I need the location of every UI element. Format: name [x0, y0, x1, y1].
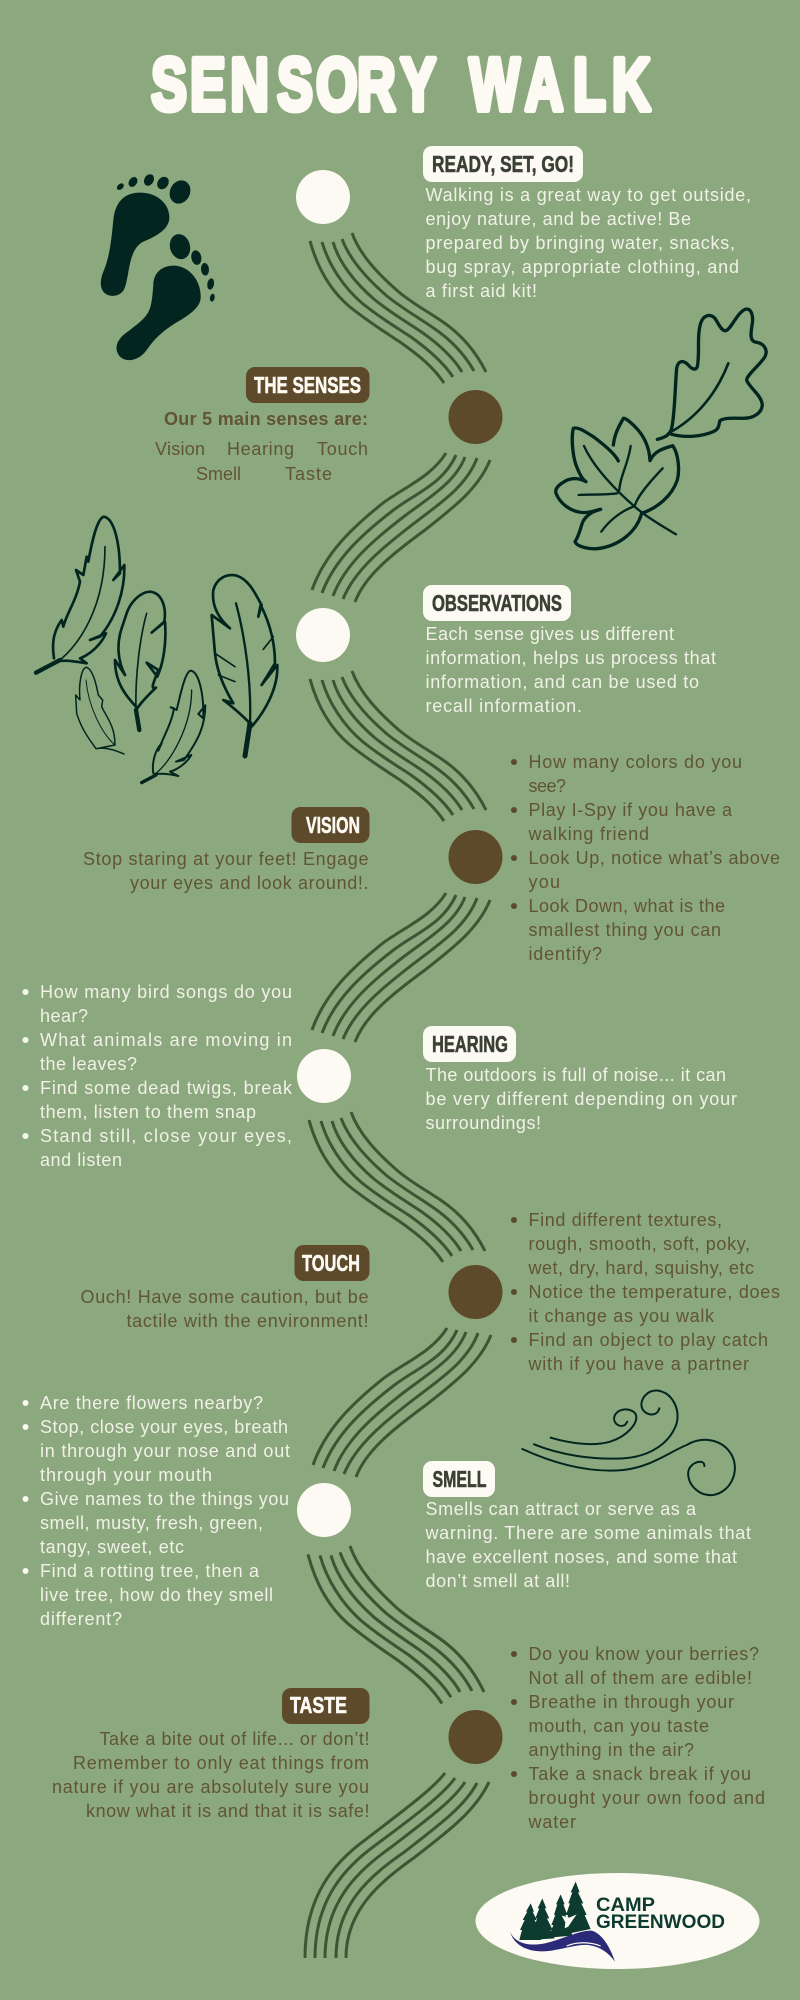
panel: taste — [52, 1644, 765, 1832]
logo wordmark: CAMP — [596, 1894, 655, 1916]
logo wordmark — [596, 1894, 725, 1933]
bullet list: smallest thing you can — [528, 920, 721, 940]
text block — [426, 185, 751, 301]
bullet list: Play I-Spy if you have a — [528, 800, 733, 820]
bullet list: Breathe in through your — [528, 1692, 734, 1712]
title: SENSORY WALK — [151, 43, 650, 126]
path line: taste to end — [305, 1773, 489, 1958]
bullet list: Notice the temperature, does — [528, 1282, 780, 1302]
path line: vision to hearing — [312, 893, 490, 1042]
text block: The outdoors is full of noise... it can — [426, 1065, 726, 1085]
text block: enjoy nature, and be active! Be — [426, 209, 691, 229]
text block: Our 5 main senses are: — [164, 409, 368, 429]
text block: a first aid kit! — [426, 281, 537, 301]
bullet list: rough, smooth, soft, poky, — [528, 1234, 750, 1254]
bullet list: tangy, sweet, etc — [40, 1537, 184, 1557]
text block: prepared by bringing water, snacks, — [426, 233, 735, 253]
heading — [292, 807, 370, 843]
bullet list — [511, 1644, 765, 1832]
text block — [52, 1729, 370, 1821]
text block: Walking is a great way to get outside, — [426, 185, 751, 205]
bullet list: different? — [40, 1609, 122, 1629]
heading: READY, SET, GO! — [432, 151, 574, 177]
icon: footprints — [101, 172, 215, 360]
bullet list: walking friend — [528, 824, 649, 844]
trail marker 2 — [448, 390, 502, 444]
bullet list: live tree, how do they smell — [40, 1585, 273, 1605]
bullet list: Take a snack break if you — [528, 1764, 751, 1784]
text block: Vision — [155, 439, 205, 459]
trail marker 3 — [296, 608, 350, 662]
bullet list: anything in the air? — [528, 1740, 694, 1760]
text block: surroundings! — [426, 1113, 541, 1133]
icon: feathers — [36, 517, 277, 783]
text block — [83, 849, 368, 893]
text block: tactile with the environment! — [126, 1311, 368, 1331]
bullet list: mouth, can you taste — [528, 1716, 709, 1736]
heading: SMELL — [432, 1466, 486, 1492]
bullet list: How many bird songs do you — [40, 982, 292, 1002]
trail marker 5 — [297, 1049, 351, 1103]
text block: bug spray, appropriate clothing, and — [426, 257, 739, 277]
logo wordmark: GREENWOOD — [596, 1911, 725, 1933]
bullet list — [22, 982, 293, 1170]
heading — [246, 367, 370, 403]
bullet list: Look Down, what is the — [528, 896, 725, 916]
bullet list: in through your nose and out — [40, 1441, 290, 1461]
bullet list: How many colors do you — [528, 752, 742, 772]
icon: leaves — [556, 309, 766, 549]
text block — [424, 1499, 751, 1591]
bullet list: hear? — [40, 1006, 88, 1026]
text block: Ouch! Have some caution, but be — [80, 1287, 368, 1307]
bullet list: Find different textures, — [528, 1210, 722, 1230]
bullet list: brought your own food and — [528, 1788, 765, 1808]
bullet list: see? — [528, 776, 566, 796]
bullet list — [22, 1393, 290, 1629]
heading: TASTE — [290, 1692, 347, 1718]
icon: wind gust — [522, 1391, 735, 1495]
panel: hearing — [22, 982, 737, 1170]
text block: recall information. — [426, 696, 582, 716]
bullet list: Find an object to play catch — [528, 1330, 768, 1350]
text block: information, and can be used to — [426, 672, 699, 692]
path line: touch to smell — [313, 1328, 491, 1477]
heading: HEARING — [432, 1031, 508, 1057]
bullet list: Give names to the things you — [40, 1489, 289, 1509]
bullet list: Not all of them are edible! — [528, 1668, 752, 1688]
text block: warning. There are some animals that — [424, 1523, 751, 1543]
trail marker 6 — [448, 1265, 502, 1319]
text block: Remember to only eat things from — [73, 1753, 369, 1773]
trail marker 7 — [297, 1483, 351, 1537]
bullet list: with if you have a partner — [528, 1354, 749, 1374]
panel: smell — [22, 1393, 751, 1629]
path line: smell to taste — [308, 1546, 484, 1704]
text block: nature if you are absolutely sure you — [52, 1777, 369, 1797]
text block: know what it is and that it is safe! — [86, 1801, 370, 1821]
trail marker 1 — [296, 170, 350, 224]
panel: touch — [80, 1210, 780, 1374]
text block: don’t smell at all! — [426, 1571, 570, 1591]
bullet list: it change as you walk — [528, 1306, 715, 1326]
bullet list: Look Up, notice what’s above — [528, 848, 780, 868]
path line: senses to observations — [312, 453, 490, 602]
panel: vision — [83, 752, 780, 964]
heading: TOUCH — [302, 1250, 360, 1276]
text block: have excellent noses, and some that — [426, 1547, 737, 1567]
bullet list: through your mouth — [40, 1465, 212, 1485]
path line: start to senses — [310, 233, 486, 383]
trail marker 4 — [448, 830, 502, 884]
text block: Smells can attract or serve as a — [426, 1499, 697, 1519]
heading — [294, 1245, 370, 1281]
bullet list: them, listen to them snap — [40, 1102, 256, 1122]
heading — [423, 1026, 516, 1062]
bullet list: Find some dead twigs, break — [40, 1078, 293, 1098]
bullet list: wet, dry, hard, squishy, etc — [528, 1258, 754, 1278]
trail marker 8 — [448, 1710, 502, 1764]
bullet list: the leaves? — [40, 1054, 137, 1074]
bullet list: smell, musty, fresh, green, — [40, 1513, 263, 1533]
text block — [426, 624, 716, 716]
text block — [426, 1065, 737, 1133]
path line: hearing to touch — [309, 1112, 485, 1262]
panel: ready, set, go — [423, 146, 751, 301]
bullet list: Stand still, close your eyes, — [40, 1126, 292, 1146]
bullet list: Are there flowers nearby? — [40, 1393, 263, 1413]
bullet list: you — [528, 872, 560, 892]
text block — [80, 1287, 368, 1331]
heading: OBSERVATIONS — [432, 590, 562, 616]
text block: Taste — [285, 464, 332, 484]
heading — [423, 146, 583, 182]
text block: Take a bite out of life... or don’t! — [100, 1729, 370, 1749]
bullet list: Do you know your berries? — [528, 1644, 759, 1664]
bullet list: water — [528, 1812, 576, 1832]
bullet list — [511, 752, 780, 964]
text block: Stop staring at your feet! Engage — [83, 849, 368, 869]
bullet list: Find a rotting tree, then a — [40, 1561, 260, 1581]
bullet list — [511, 1210, 780, 1374]
text block: be very different depending on your — [426, 1089, 737, 1109]
text block: Touch — [317, 439, 368, 459]
icon: trees and dove — [510, 1882, 615, 1962]
text block: Each sense gives us different — [426, 624, 674, 644]
path line: observations to vision — [310, 671, 486, 821]
text block — [155, 409, 368, 484]
heading: THE SENSES — [254, 372, 361, 398]
text block: information, helps us process that — [426, 648, 716, 668]
heading: VISION — [306, 812, 360, 838]
panel: observations — [423, 585, 716, 716]
heading — [282, 1688, 370, 1724]
text block: Hearing — [227, 439, 294, 459]
heading — [423, 585, 571, 621]
bullet list: identify? — [528, 944, 602, 964]
bullet list: What animals are moving in — [40, 1030, 292, 1050]
text block: your eyes and look around!. — [130, 873, 368, 893]
text block: Smell — [196, 464, 241, 484]
bullet list: and listen — [40, 1150, 122, 1170]
panel: the senses — [155, 367, 370, 484]
logo: camp greenwood — [476, 1873, 760, 1969]
heading — [423, 1461, 495, 1497]
bullet list: Stop, close your eyes, breath — [40, 1417, 288, 1437]
